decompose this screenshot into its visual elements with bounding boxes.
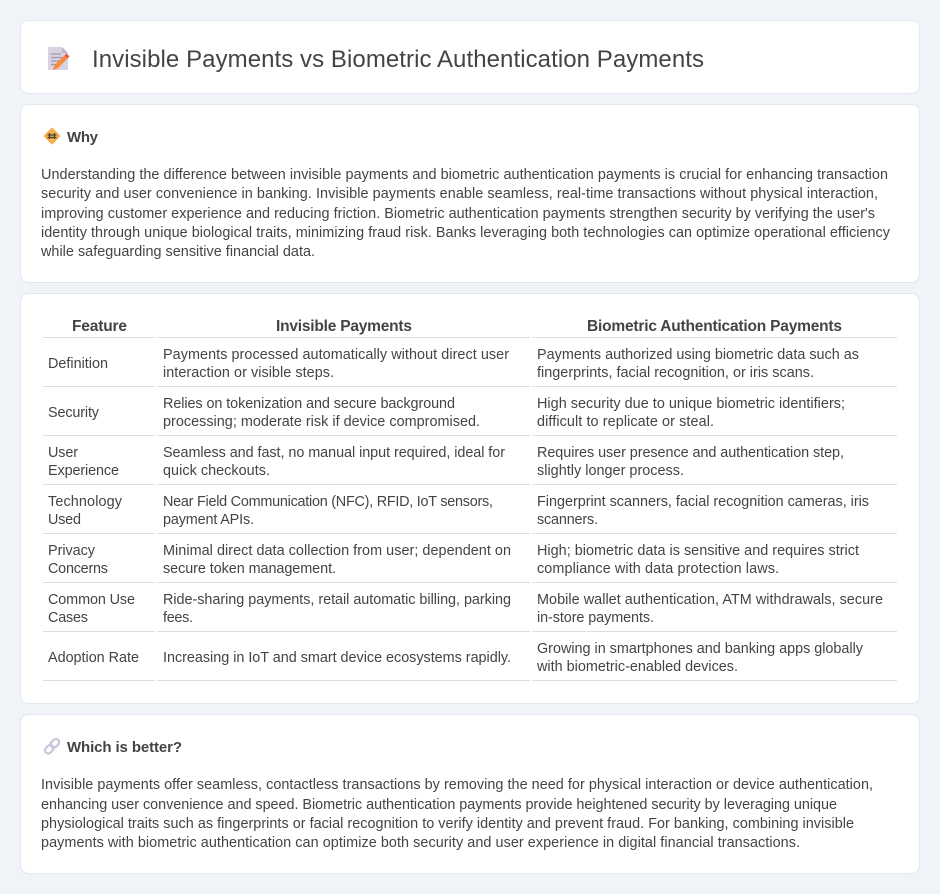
- row: privacy concerns: secure token management.: [163, 561, 336, 577]
- row: security: Relies on tokenization and secure background: [163, 396, 455, 412]
- row: common use cases: Ride-sharing payments, retail automatic billing, parking: [163, 592, 511, 608]
- row: definition: Payments authorized using biometric data such as: [537, 347, 859, 363]
- row: definition: fingerprints, facial recognition, or iris scans.: [537, 365, 814, 381]
- row: technology used: Fingerprint scanners, facial recognition cameras, iris: [537, 494, 869, 510]
- row: technology used: Technology: [48, 494, 123, 510]
- text block: which is better: payments with biometric authentication can optimize both security and user experience in digital financial transactions.: [41, 835, 800, 851]
- text block: which is better: physiological traits such as fingerprints or facial recognition to verify identity and prevent fraud. For banking, combining invisible: [41, 816, 854, 832]
- icon: link: [44, 738, 60, 755]
- heading: which is better: Which is better?: [67, 739, 182, 756]
- text block: why: identity through unique biological traits, minimizing fraud risk. Banks leveraging both technologies can optimize operational efficiency: [41, 225, 891, 241]
- row: security: difficult to replicate or steal.: [537, 414, 714, 430]
- row: definition: interaction or visible steps.: [163, 365, 334, 381]
- row: technology used: Used: [48, 512, 81, 528]
- row: privacy concerns: Minimal direct data collection from user; dependent on: [163, 543, 511, 559]
- row: technology used: [48, 494, 869, 528]
- text block: which is better: [41, 777, 873, 851]
- text block: which is better: enhancing user convenience and speed. Biometric authentication payments provide heightened security by leveraging unique: [41, 797, 837, 813]
- row: common use cases: Common Use: [48, 592, 135, 608]
- row: user experience: User: [48, 445, 78, 461]
- icon: warning diamond: [44, 128, 60, 144]
- row: adoption rate: Adoption Rate: [48, 650, 139, 666]
- row: privacy concerns: High; biometric data is sensitive and requires strict: [537, 543, 859, 559]
- row: security: High security due to unique biometric identifiers;: [537, 396, 845, 412]
- row: privacy concerns: Privacy: [48, 543, 96, 559]
- row: definition: Definition: [48, 356, 108, 372]
- row: adoption rate: Increasing in IoT and smart device ecosystems rapidly.: [163, 650, 511, 666]
- row: security: [48, 396, 845, 430]
- row: common use cases: Mobile wallet authentication, ATM withdrawals, secure: [537, 592, 883, 608]
- row: definition: Payments processed automatically without direct user: [163, 347, 509, 363]
- panel: title: [20, 20, 920, 94]
- text block: which is better: Invisible payments offer seamless, contactless transactions by removing the need for physical interaction or device authentication,: [41, 777, 873, 793]
- table header row: Feature: [72, 318, 127, 335]
- row: definition: [48, 347, 859, 381]
- table header row: Invisible Payments: [276, 318, 412, 335]
- heading: why: Why: [67, 129, 99, 146]
- row: user experience: Experience: [48, 463, 119, 479]
- row: technology used: scanners.: [537, 512, 598, 528]
- panel: comparison table: [20, 294, 920, 704]
- row: user experience: slightly longer process.: [537, 463, 684, 479]
- text block: why: Understanding the difference between invisible payments and biometric authentication payments is crucial for enhancing transaction: [41, 167, 888, 183]
- row: user experience: quick checkouts.: [163, 463, 270, 479]
- text block: why: while safeguarding sensitive financial data.: [40, 244, 315, 260]
- row: privacy concerns: [48, 543, 859, 577]
- row: common use cases: Cases: [48, 610, 88, 626]
- row: user experience: [48, 445, 844, 479]
- row: technology used: Near Field Communication (NFC), RFID, IoT sensors,: [163, 494, 493, 510]
- row: common use cases: fees.: [163, 610, 193, 626]
- title text: Invisible Payments vs Biometric Authentication Payments: [92, 46, 704, 73]
- row: common use cases: in-store payments.: [537, 610, 654, 626]
- text block: why: security and user convenience in banking. Invisible payments enable seamless, real-time transactions without physical interaction,: [41, 186, 878, 202]
- row: adoption rate: [48, 641, 864, 675]
- panel: which is better: [20, 714, 920, 874]
- row: security: Security: [48, 405, 100, 421]
- text block: why: [40, 167, 891, 260]
- row: adoption rate: with biometric-enabled devices.: [536, 659, 738, 675]
- row: common use cases: [48, 592, 883, 626]
- row: technology used: payment APIs.: [163, 512, 254, 528]
- row: adoption rate: Growing in smartphones and banking apps globally: [537, 641, 864, 657]
- table header row: Biometric Authentication Payments: [587, 318, 842, 335]
- row: privacy concerns: compliance with data protection laws.: [537, 561, 779, 577]
- text block: why: improving customer experience and reducing friction. Biometric authentication payments strengthen security by verifying the user's: [41, 206, 875, 222]
- table header row: [72, 318, 842, 335]
- row: security: processing; moderate risk if device compromised.: [163, 414, 480, 430]
- panel: why: [20, 104, 920, 282]
- row: user experience: Seamless and fast, no manual input required, ideal for: [163, 445, 505, 461]
- row: user experience: Requires user presence and authentication step,: [537, 445, 844, 461]
- row: privacy concerns: Concerns: [48, 561, 108, 577]
- icon: document with pencil: [48, 47, 70, 70]
